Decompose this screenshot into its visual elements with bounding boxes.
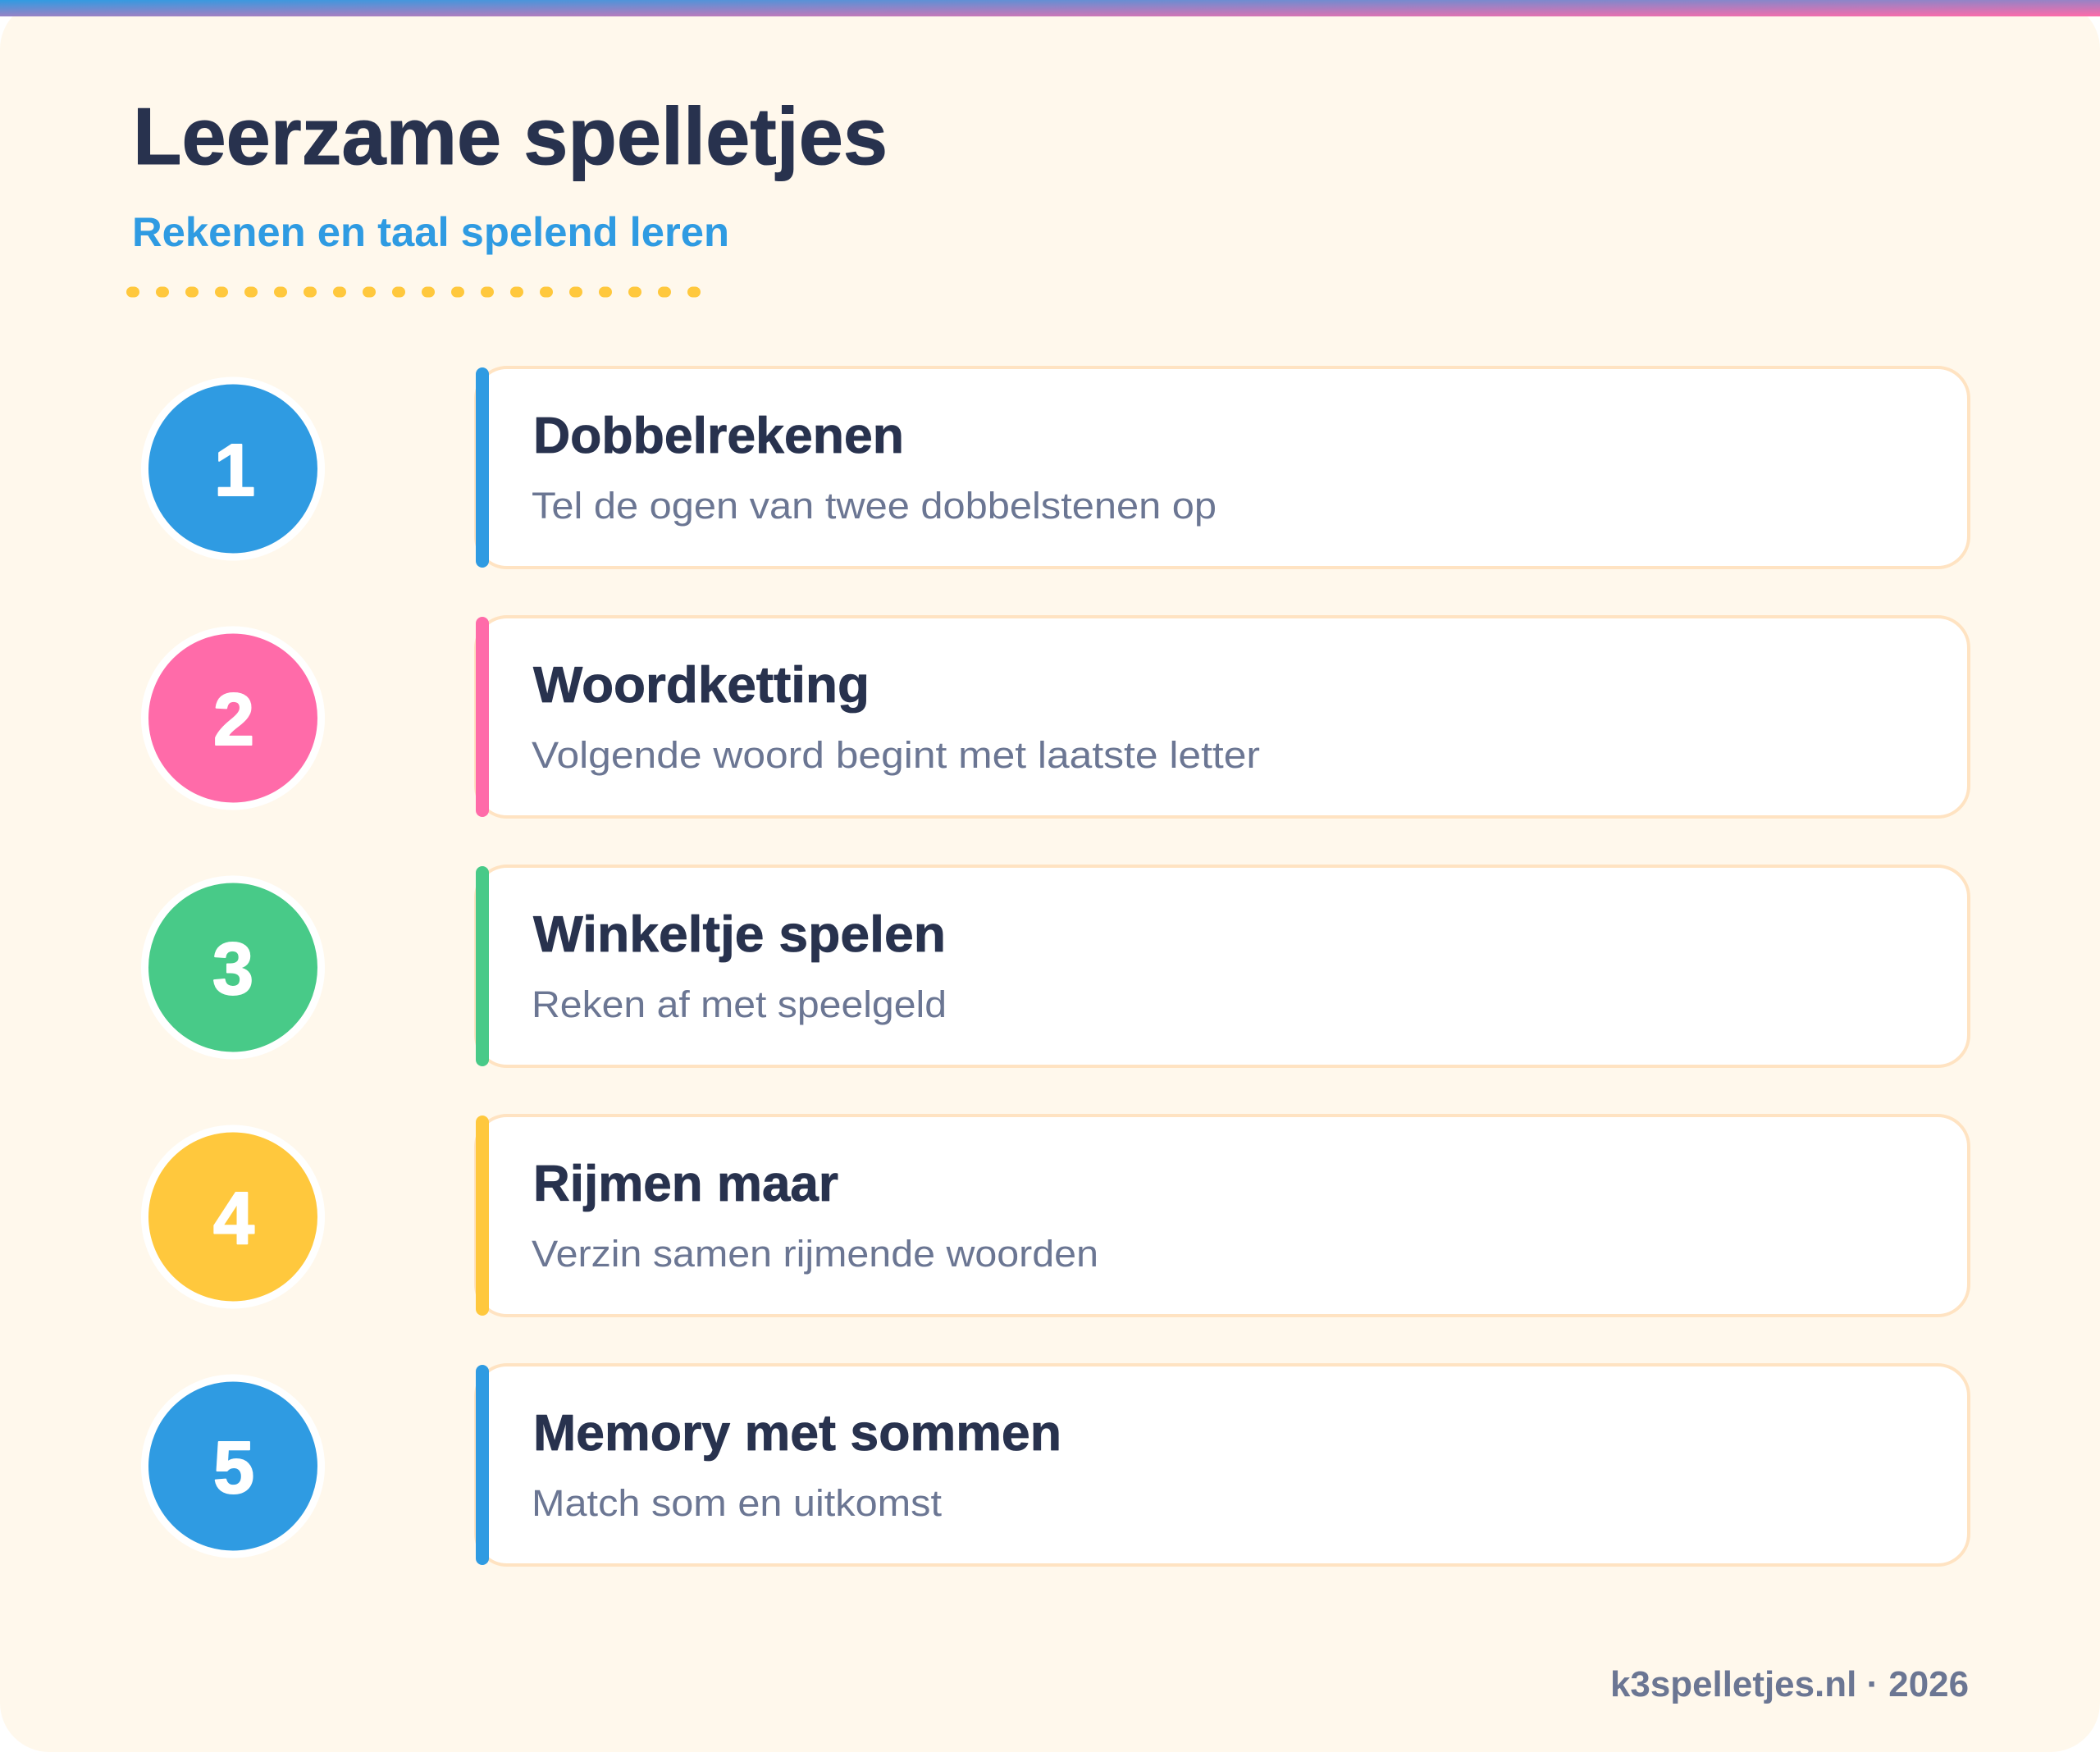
item 2: Woordketting (144, 617, 1969, 817)
card 4 (476, 1116, 1969, 1316)
card 4 description: Verzin samen rijmende woorden (532, 1233, 1098, 1275)
item 4: Rijmen maar (144, 1116, 1969, 1316)
card 2 title: Woordketting (533, 657, 870, 714)
card 4 title: Rijmen maar (533, 1156, 838, 1212)
card 2 (476, 617, 1969, 817)
item 1: Dobbelrekenen (144, 367, 1969, 568)
number badge 5 (144, 1378, 322, 1554)
item 5: Memory met sommen (144, 1365, 1969, 1565)
number badge 4: 4 (213, 1178, 254, 1260)
subtitle: Rekenen en taal spelend leren (132, 209, 729, 255)
title: Leerzame spelletjes (133, 91, 888, 181)
number badge 4 (144, 1129, 322, 1305)
card 1 (476, 367, 1969, 568)
card 5 (476, 1365, 1969, 1565)
dotted divider (131, 287, 701, 297)
card 3 description: Reken af met speelgeld (532, 983, 947, 1025)
top gradient bar (0, 0, 2100, 16)
card 2 description: Volgende woord begint met laatste letter (532, 734, 1260, 776)
number badge 1 (144, 381, 322, 557)
number badge 3: 3 (212, 928, 253, 1011)
number badge 2 (144, 630, 322, 806)
number badge 5: 5 (213, 1427, 254, 1509)
footer: k3spelletjes.nl · 2026 (1610, 1664, 1969, 1704)
card 3 (476, 866, 1969, 1066)
card 5 description: Match som en uitkomst (532, 1482, 943, 1524)
card 1 title: Dobbelrekenen (533, 408, 904, 464)
card 5 title: Memory met sommen (533, 1405, 1061, 1462)
number badge 3 (144, 879, 322, 1056)
number badge 2: 2 (213, 679, 254, 761)
card 3 title: Winkeltje spelen (533, 906, 946, 963)
card 1 description: Tel de ogen van twee dobbelstenen op (532, 485, 1217, 527)
item 3: Winkeltje spelen (144, 866, 1969, 1066)
number badge 1: 1 (214, 430, 255, 512)
